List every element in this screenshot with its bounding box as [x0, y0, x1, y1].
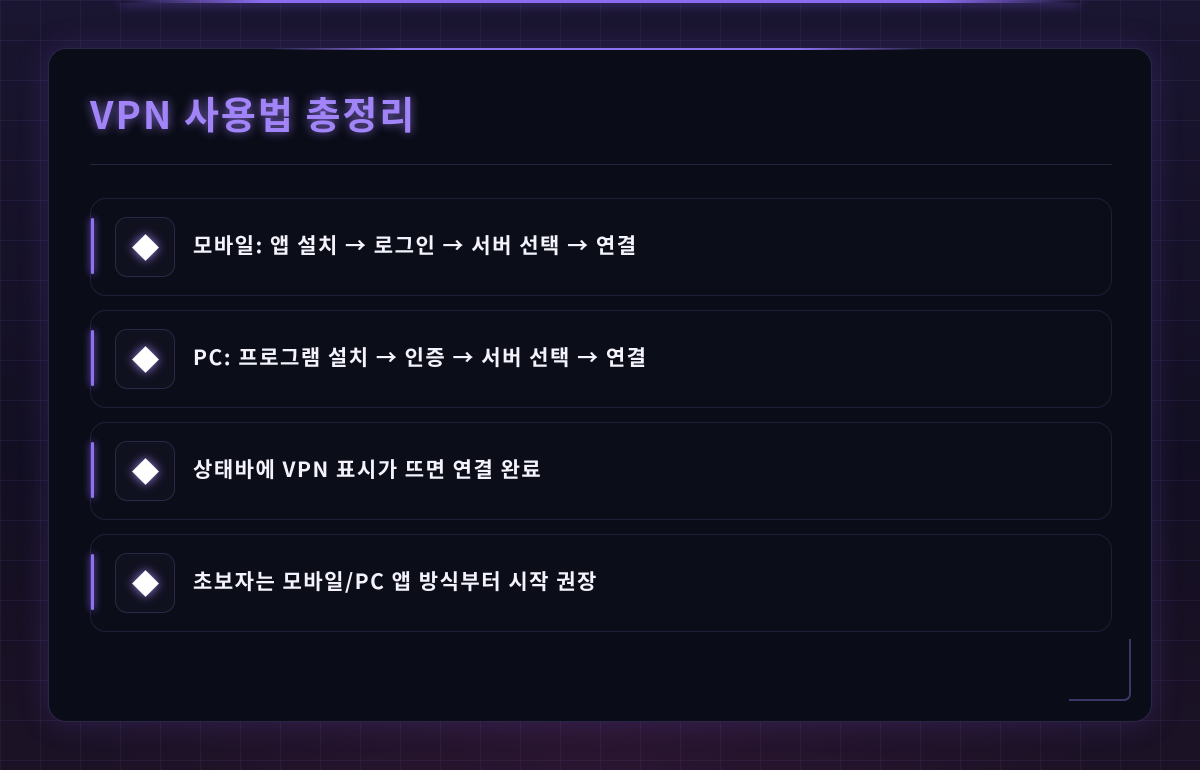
item 3	[90, 422, 1112, 520]
item 4	[90, 534, 1112, 632]
text 3: 상태바에 VPN 표시가 뜨면 연결 완료	[193, 454, 542, 484]
text 1: 모바일: 앱 설치 → 로그인 → 서버 선택 → 연결	[193, 230, 638, 260]
icon: diamond	[115, 217, 175, 277]
icon: diamond	[115, 441, 175, 501]
item 1	[90, 198, 1112, 296]
corner bracket	[1069, 639, 1131, 701]
text 4: 초보자는 모바일/PC 앱 방식부터 시작 권장	[193, 566, 598, 596]
item 2	[90, 310, 1112, 408]
title: VPN 사용법 총정리	[90, 85, 416, 140]
icon: diamond	[115, 329, 175, 389]
text 2: PC: 프로그램 설치 → 인증 → 서버 선택 → 연결	[193, 342, 648, 372]
icon: diamond	[115, 553, 175, 613]
